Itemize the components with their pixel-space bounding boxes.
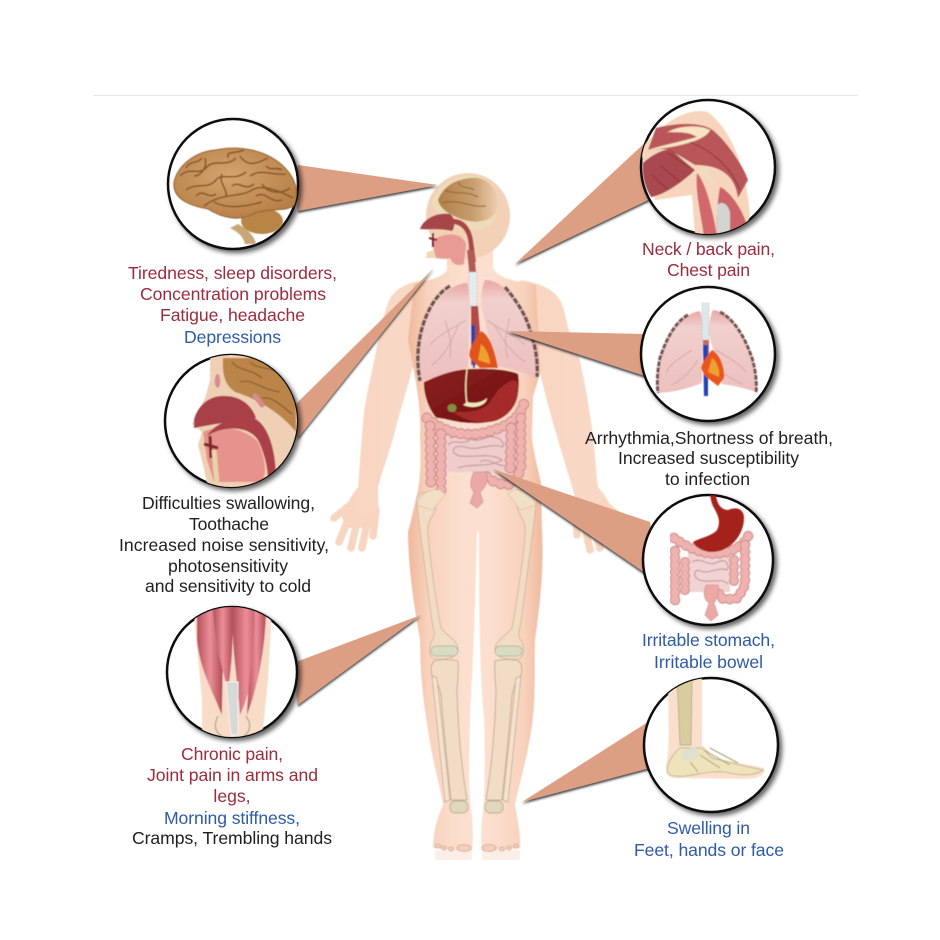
- pointer: shoulder: [515, 140, 665, 264]
- pointer: mouth: [292, 268, 434, 438]
- mouth symptoms text: Difficulties swallowing,: [142, 493, 315, 513]
- bowel symptoms text: Irritable bowel: [654, 652, 763, 672]
- foot symptoms text: Swelling in: [667, 818, 750, 838]
- pointer: leg muscles: [296, 615, 421, 705]
- lungs symptoms text: Increased susceptibility: [618, 448, 799, 468]
- brain symptoms text: Depressions: [184, 327, 281, 347]
- shoulder symptoms text: [642, 239, 775, 280]
- head: [426, 173, 510, 259]
- pointer: intestines: [493, 469, 650, 575]
- shoulder symptoms text: Chest pain: [667, 260, 750, 280]
- lungs symptoms text: to infection: [665, 469, 750, 489]
- brain symptoms text: Tiredness, sleep disorders,: [128, 263, 337, 283]
- liver and stomach: [424, 369, 519, 423]
- brain symptoms text: Concentration problems: [140, 284, 326, 304]
- mouth symptoms text: Toothache: [189, 514, 269, 534]
- circle: leg muscles: [167, 604, 297, 738]
- toes: [436, 844, 518, 852]
- pointer: lungs: [507, 331, 645, 376]
- bowel symptoms text: [642, 630, 775, 672]
- human body figure: [334, 173, 621, 860]
- left leg: [408, 530, 477, 851]
- leg symptoms text: [132, 744, 332, 848]
- trachea and esophagus: [467, 250, 478, 310]
- circle: brain: [168, 119, 298, 249]
- lungs symptoms text: [585, 428, 833, 489]
- right leg bones: [485, 492, 536, 813]
- leg symptoms text: Chronic pain,: [181, 744, 283, 764]
- pelvis: [417, 490, 536, 510]
- mouth symptoms text: [119, 493, 329, 596]
- foot symptoms text: Feet, hands or face: [634, 840, 784, 860]
- mouth symptoms text: and sensitivity to cold: [145, 576, 311, 596]
- leg symptoms text: legs,: [213, 786, 251, 806]
- head section: brain and airway: [420, 176, 497, 265]
- circle: shoulder: [640, 100, 775, 236]
- pointer: foot: [522, 722, 650, 802]
- mouth symptoms text: photosensitivity: [168, 556, 288, 576]
- foot symptoms text: [634, 818, 784, 860]
- bowel symptoms text: Irritable stomach,: [642, 630, 775, 650]
- torso: [408, 240, 542, 533]
- brain symptoms text: [128, 263, 337, 347]
- mouth symptoms text: Increased noise sensitivity,: [119, 535, 329, 555]
- circle: foot: [644, 678, 778, 812]
- brain symptoms text: Fatigue, headache: [160, 305, 305, 325]
- left leg bones: [417, 492, 468, 813]
- right leg: [479, 530, 543, 851]
- shoulder symptoms text: Neck / back pain,: [642, 239, 775, 259]
- leg symptoms text: Morning stiffness,: [164, 808, 300, 828]
- circle: lungs: [641, 287, 775, 421]
- lungs: [418, 280, 537, 381]
- pointer: brain: [298, 165, 438, 211]
- intestines: [427, 399, 525, 508]
- left arm and hand: [334, 280, 425, 548]
- foot reflections: [435, 850, 520, 860]
- infographic canvas: [93, 95, 858, 860]
- lungs symptoms text: Arrhythmia,Shortness of breath,: [585, 428, 833, 448]
- circle: stomach and bowel: [643, 495, 773, 625]
- leg symptoms text: Cramps, Trembling hands: [132, 828, 332, 848]
- circle: mouth and throat: [165, 354, 300, 488]
- right arm and hand: [520, 280, 621, 550]
- leg symptoms text: Joint pain in arms and: [147, 765, 318, 785]
- heart: [469, 306, 498, 368]
